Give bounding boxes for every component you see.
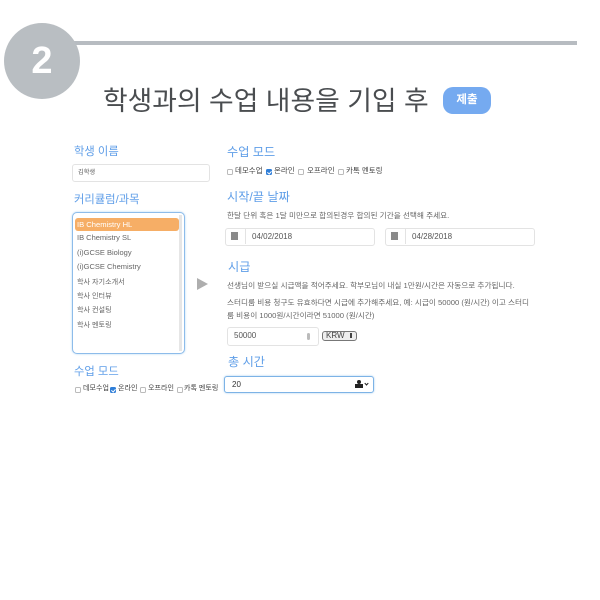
rate input: 50000 [234, 331, 256, 340]
heading: hourly rate: 시급 [228, 260, 250, 274]
icon: person [355, 380, 363, 388]
curriculum list box [72, 212, 185, 354]
arrow [197, 278, 208, 290]
list item: IB Chemistry SL [77, 233, 131, 242]
icon: chevron [364, 381, 369, 386]
currency select [322, 331, 357, 341]
submit button: 제출 [456, 94, 478, 106]
currency select: KRW [326, 331, 345, 340]
list item: 학사 자기소개서 [77, 278, 125, 286]
left heading: student name: 학생 이름 [74, 146, 119, 158]
rate help text 2: 스터디룸 비용 청구도 유효하다면 시급에 추가해주세요, 예: 시급이 50000 (원/시간) 이고 스터디 [227, 298, 529, 307]
heading: start/end date: 시작/끝 날짜 [227, 190, 290, 204]
right heading: class mode: 수업 모드 [227, 145, 275, 159]
student name input: 김학생 [78, 169, 95, 176]
list scrollbar [179, 215, 182, 351]
left heading: curriculum: 커리큘럼/과목 [74, 194, 140, 206]
heading: total hours: 총 시간 [228, 355, 265, 369]
step number badge: 2 [31, 40, 53, 82]
left class mode options [75, 384, 218, 393]
list item: 학사 인터뷰 [77, 292, 112, 300]
start date field: 04/02/2018 [252, 232, 292, 241]
total hours input [224, 376, 374, 393]
left class mode options: 오프라인 [148, 385, 174, 392]
student name input [72, 164, 210, 182]
title: 학생과의 수업 내용을 기입 후 [103, 86, 429, 116]
selected item: IB Chemistry HL [75, 218, 179, 231]
left heading: class mode: 수업 모드 [74, 366, 119, 378]
step number badge [4, 23, 80, 99]
list item: 학사 컨설팅 [77, 306, 112, 314]
right class mode options: 오프라인 [307, 166, 335, 175]
list item: 학사 멘토링 [77, 321, 112, 329]
end date field [385, 228, 535, 246]
right class mode options: 온라인 [274, 166, 295, 175]
date help text: 한달 단위 혹은 1달 미만으로 합의된경우 합의된 기간을 선택해 주세요. [227, 211, 449, 220]
submit button [443, 87, 491, 114]
rate help text 1: 선생님이 받으실 시급액을 적어주세요. 학부모님이 내실 1만원/시간은 자동으로 추가됩니다. [227, 281, 515, 290]
right class mode options [227, 166, 383, 175]
start date field [225, 228, 375, 246]
rate help text 3: 룸 비용이 1000원/시간이라면 51000 (원/시간) [227, 311, 374, 320]
right class mode options: 카톡 멘토링 [346, 166, 383, 175]
left class mode options: 카톡 멘토링 [184, 385, 218, 392]
selected item: IB Chemistry HL: IB Chemistry HL [77, 220, 132, 229]
total hours input: 20 [232, 380, 241, 389]
list item: (i)GCSE Chemistry [77, 262, 141, 271]
left class mode options: 온라인 [118, 385, 137, 392]
left class mode options: 데모수업 [83, 385, 109, 392]
list item: (i)GCSE Biology [77, 248, 132, 257]
rate input [227, 327, 319, 346]
header rule [70, 41, 577, 45]
right class mode options: 데모수업 [235, 166, 263, 175]
end date field: 04/28/2018 [412, 232, 452, 241]
